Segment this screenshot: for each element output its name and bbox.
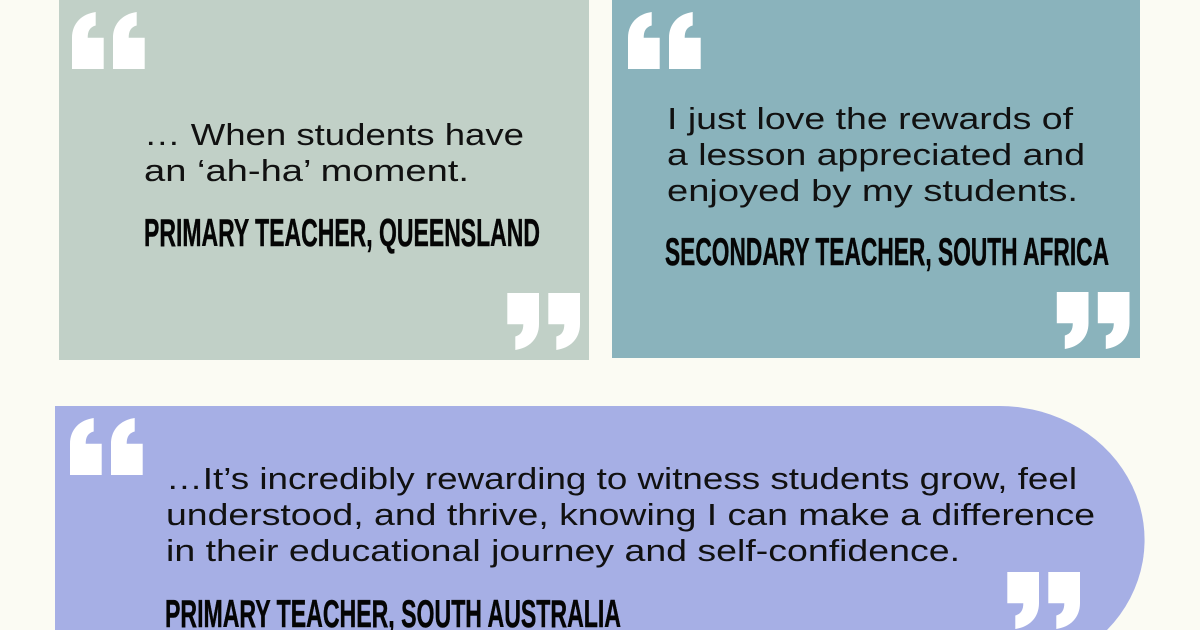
quote text <box>667 101 1085 208</box>
icon: closing quotation mark <box>1007 572 1080 629</box>
panel: secondary teacher South Africa quote <box>612 0 1140 358</box>
panel: primary teacher Queensland quote <box>59 0 589 360</box>
attribution: PRIMARY TEACHER, QUEENSLAND <box>144 212 540 255</box>
icon: opening quotation mark <box>72 12 145 69</box>
quote text: … When students have <box>144 117 524 152</box>
quote text: …It’s incredibly rewarding to witness students grow, feel <box>166 461 1077 496</box>
quote text: understood, and thrive, knowing I can make a difference <box>166 497 1095 532</box>
icon: closing quotation mark <box>1057 292 1130 349</box>
panel: primary teacher South Australia quote <box>55 406 1145 630</box>
icon: opening quotation mark <box>70 418 143 475</box>
icon: closing quotation mark <box>507 293 580 350</box>
quote text: I just love the rewards of <box>667 101 1073 136</box>
quote text: an ‘ah-ha’ moment. <box>144 153 469 188</box>
icon: opening quotation mark <box>628 12 701 69</box>
quote text: in their educational journey and self-confidence. <box>166 533 960 568</box>
quote text <box>144 117 524 188</box>
quote text: enjoyed by my students. <box>667 173 1078 208</box>
quote text: a lesson appreciated and <box>667 137 1085 172</box>
quote text <box>166 461 1095 568</box>
